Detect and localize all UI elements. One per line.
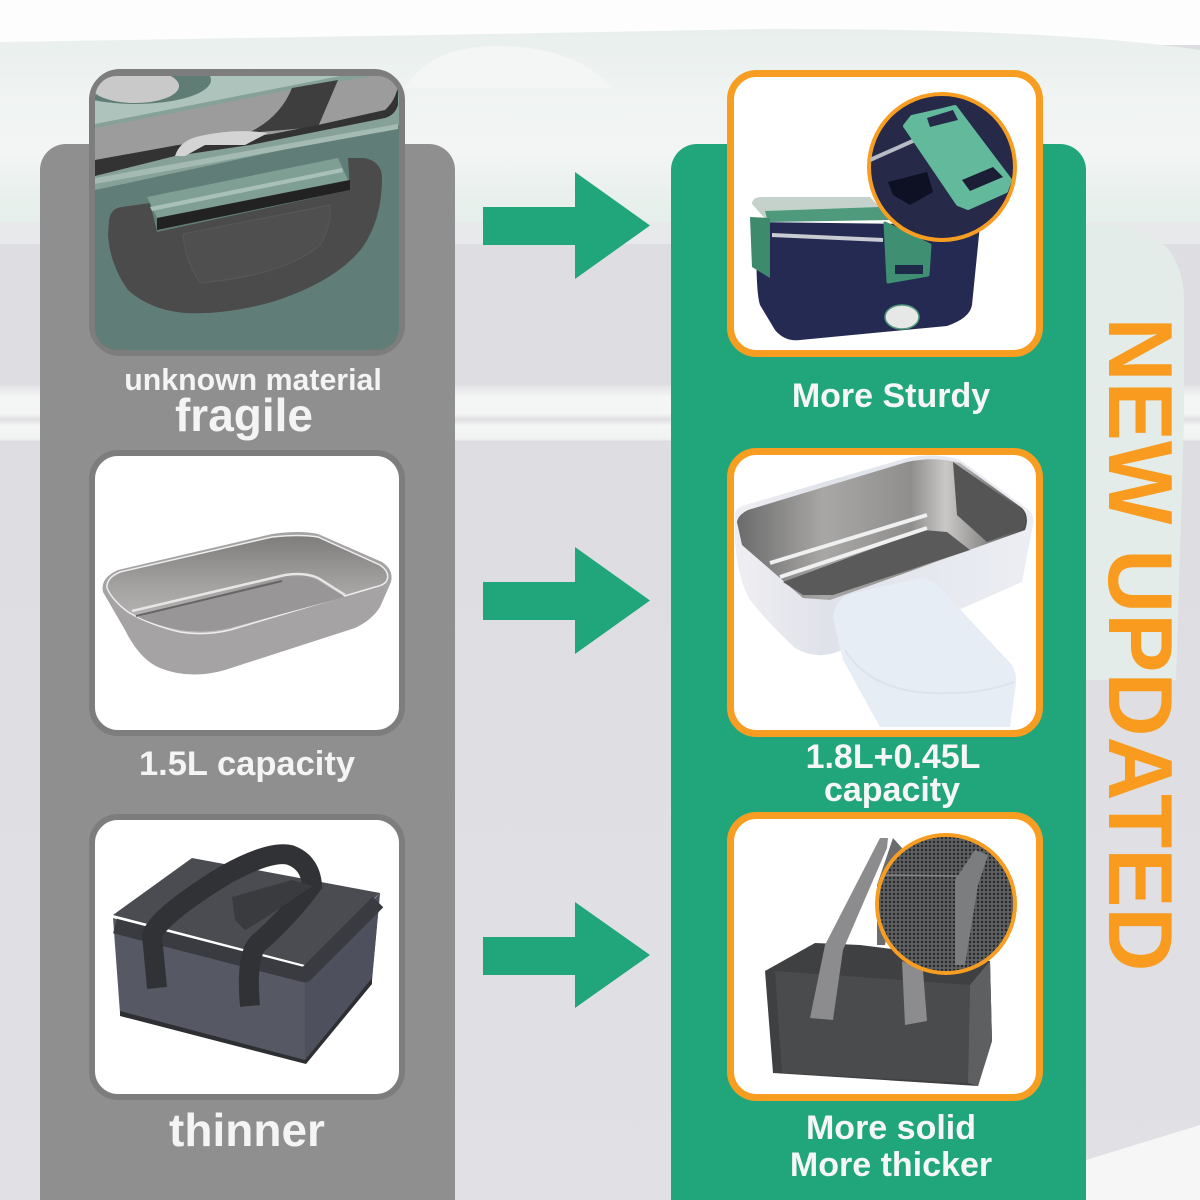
panel: old version (grey) <box>40 144 455 1200</box>
title: NEW UPDATED vertical: NEW UPDATED <box>1089 318 1190 972</box>
card: new solid bag <box>730 816 1040 1098</box>
label: More thicker: More thicker <box>790 1146 992 1184</box>
label: More Sturdy: More Sturdy <box>792 377 990 415</box>
card: old 1.5L tray <box>92 453 402 733</box>
icon: zoomed mesh circle <box>877 835 1015 973</box>
label: capacity: capacity <box>824 771 960 809</box>
card: old thin bag <box>92 817 402 1097</box>
label: thinner: thinner <box>169 1104 325 1156</box>
icon: zoomed latch circle <box>869 94 1015 240</box>
card: new 1.8L tray with box <box>730 452 1040 734</box>
label: More solid: More solid <box>806 1109 976 1147</box>
label: 1.5L capacity: 1.5L capacity <box>139 745 355 783</box>
card: new sturdy lunch box <box>730 74 1040 354</box>
panel: new version (green) <box>671 144 1086 1200</box>
arrow: sturdiness comparison <box>483 172 650 279</box>
label: fragile: fragile <box>175 389 313 441</box>
icon: left clip <box>750 217 770 278</box>
icon: small food container <box>833 578 1016 727</box>
label: 1.8L+0.45L: 1.8L+0.45L <box>806 738 980 776</box>
card: fragile old latch <box>89 69 405 356</box>
arrow: capacity comparison <box>483 547 650 654</box>
label: unknown material: unknown material <box>124 364 382 397</box>
icon: power button <box>885 305 919 329</box>
arrow: bag comparison <box>483 902 650 1008</box>
icon: front clip <box>885 223 930 282</box>
